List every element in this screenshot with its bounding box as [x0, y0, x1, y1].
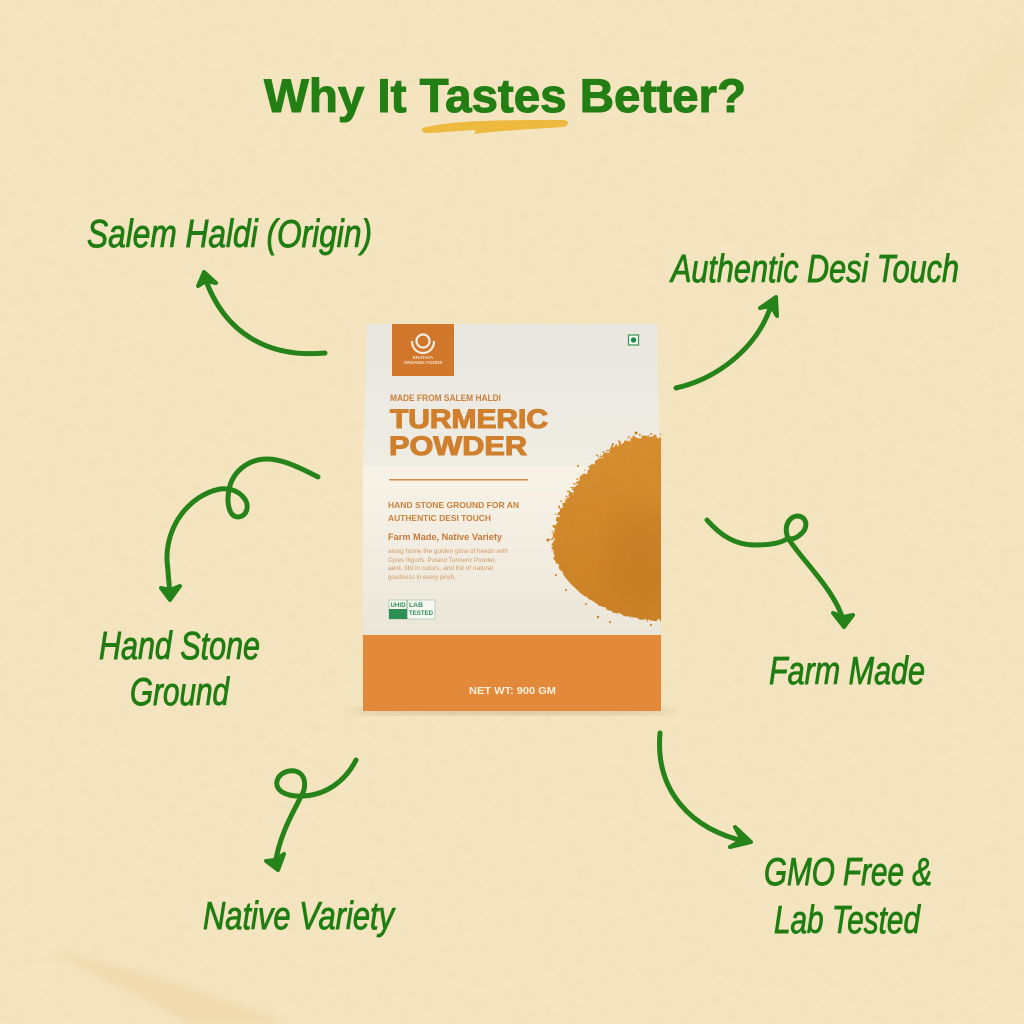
small description: goodness in every pinch. — [388, 575, 456, 581]
product name: POWDER — [389, 431, 527, 461]
tagline: AUTHENTIC DESI TOUCH — [388, 513, 491, 523]
small description: aent, tibt in colors, and list of natural — [388, 566, 493, 572]
label: GMO Free and Lab Tested: GMO Free & — [764, 851, 932, 894]
product name: TURMERIC — [390, 404, 548, 434]
lab tested badge: UHID — [390, 603, 406, 609]
arrow: to Native Variety — [266, 760, 356, 870]
veg mark — [628, 335, 638, 345]
label: Farm Made: Farm Made — [769, 650, 925, 693]
orange base band — [363, 635, 661, 711]
divider rule — [389, 479, 528, 480]
arrow: to Salem Haldi — [198, 272, 325, 354]
label: GMO Free and Lab Tested — [764, 851, 932, 942]
label: Hand Stone Ground: Ground — [130, 671, 230, 714]
lab tested badge — [389, 600, 435, 619]
small description — [388, 549, 508, 581]
product name — [389, 404, 548, 461]
lab tested badge: TESTED — [409, 611, 434, 617]
tagline: HAND STONE GROUND FOR AN — [388, 500, 519, 510]
small description: Cpres thgurls. Purand Turmeric Powder, — [388, 558, 496, 564]
net weight: NET WT: 900 GM — [469, 685, 556, 697]
title: Why It Tastes Better? — [264, 70, 746, 123]
logo block — [392, 324, 454, 376]
arrow: to Farm Made — [707, 516, 853, 627]
lab tested badge: LAB — [409, 603, 424, 609]
title underline brush stroke — [422, 120, 568, 134]
box lower panel — [363, 466, 661, 636]
turmeric powder pile — [546, 432, 661, 626]
text: made from Salem Haldi: MADE FROM SALEM HALDI — [390, 393, 501, 403]
arrow: to Hand Stone Ground — [161, 459, 318, 600]
label: Hand Stone Ground — [99, 625, 260, 714]
subheading: Farm Made, Native Variety — [388, 532, 503, 543]
arrow: to Authentic Desi Touch — [676, 297, 777, 388]
logo block: KRATAYA — [413, 355, 434, 360]
tagline — [388, 500, 519, 523]
label: Salem Haldi (Origin): Salem Haldi (Origin) — [87, 213, 372, 256]
label: Hand Stone Ground: Hand Stone — [99, 625, 260, 668]
box upper panel — [363, 324, 660, 466]
arrow: to GMO Free and Lab Tested — [660, 733, 751, 847]
logo block: ORGANIC FOODS — [404, 360, 442, 365]
label: Native Variety: Native Variety — [203, 895, 396, 938]
small description: along home the golden glow of heedn with — [388, 549, 508, 555]
product box — [347, 324, 677, 715]
label: GMO Free and Lab Tested: Lab Tested — [774, 899, 921, 942]
